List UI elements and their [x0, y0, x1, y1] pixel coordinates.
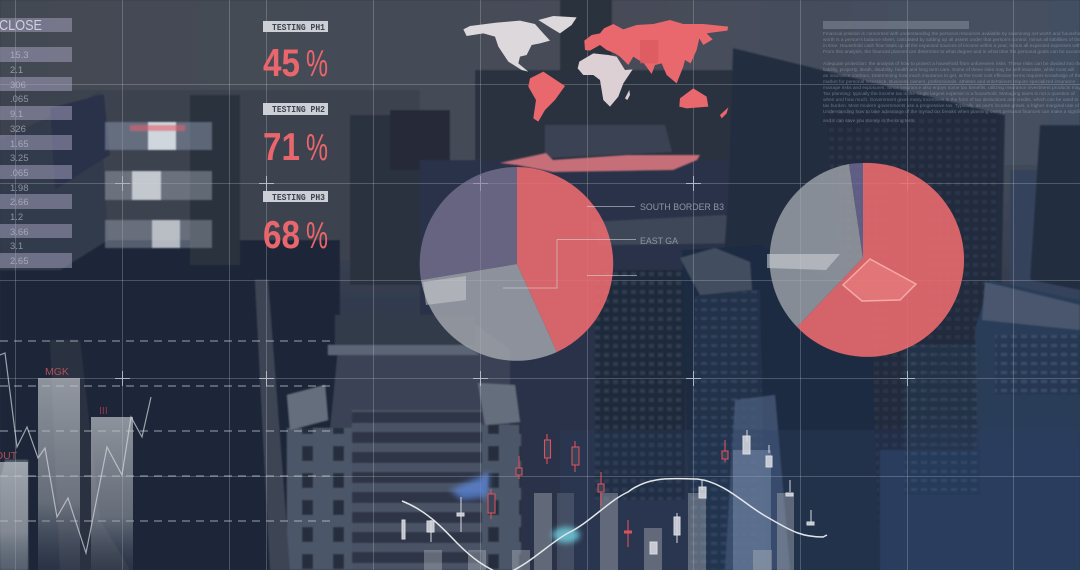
table striped rows — [0, 18, 72, 268]
north america — [463, 21, 550, 72]
purple slice — [420, 167, 517, 280]
first paragraph: in time. Household cash flow totals up all the expected sources of income within a year, minus all expected expenses within — [823, 43, 1080, 49]
central asia shade — [640, 40, 658, 63]
glow spots — [450, 472, 580, 543]
testing ph1: % — [306, 43, 328, 85]
table values: 3.66 — [10, 227, 28, 238]
testing ph1: TESTING PH1 — [272, 23, 326, 33]
text block: financial paragraph — [823, 21, 1080, 124]
table values: 2.1 — [10, 65, 23, 76]
pie chart one — [420, 167, 613, 361]
table values: 3.25 — [10, 153, 28, 164]
second paragraph: liability, property, death, disability, health and long term care. Some of these risks may be self-insurable, while most will — [823, 67, 1074, 73]
testing ph3: 68 — [263, 214, 300, 257]
gray slice — [770, 164, 863, 327]
bar middle — [91, 417, 133, 570]
map reflection smear — [500, 153, 700, 172]
table values: 2.65 — [10, 256, 28, 267]
second paragraph: Adequate protection: the analysis of how to protect a household from unforeseen risks. These risks can be divided into the — [823, 61, 1080, 67]
panel: close data table — [0, 17, 72, 268]
second paragraph: market for personal insurance. Business owners, professionals, athletes and entertainers require specialized insurance — [823, 79, 1076, 85]
south border label: SOUTH BORDER B3 — [640, 202, 724, 213]
second paragraph: an insurance contract. Determining how much insurance to get, at the most cost effective terms requires knowledge of the — [823, 73, 1080, 79]
label middle: III — [99, 405, 108, 417]
second paragraph: and it can save you money in the long term. — [823, 118, 916, 124]
greenland — [538, 16, 577, 33]
panel: testing percentages — [263, 21, 328, 257]
australia — [679, 88, 708, 108]
purple slice — [849, 163, 864, 258]
block heading bar — [823, 21, 969, 29]
red slice — [517, 167, 613, 352]
line series — [0, 353, 151, 553]
testing ph3: % — [306, 215, 328, 257]
first paragraph: Financial position is concerned with understanding the personal resources available by examining net worth and household — [823, 31, 1080, 37]
east label: EAST GA — [640, 236, 679, 247]
pie one callouts — [503, 202, 724, 288]
table values: 306 — [10, 80, 26, 91]
white candles — [402, 430, 814, 554]
bar three — [105, 220, 212, 248]
first paragraph: worth is a person's balance sheet, calculated by adding up all assets under that person's control, minus all liabilities of the — [823, 37, 1080, 43]
testing ph3 — [263, 191, 328, 257]
new zealand — [720, 107, 728, 118]
bottom candlestick chart — [402, 430, 827, 570]
roof outline — [843, 259, 916, 301]
table values: 3.1 — [10, 241, 23, 252]
bar one — [105, 122, 212, 150]
panel: progress bars — [105, 122, 212, 248]
table values: 1.2 — [10, 212, 23, 223]
table values: .065 — [10, 168, 28, 179]
table values: 326 — [10, 124, 26, 135]
testing ph1: 45 — [263, 42, 300, 85]
bar mgk — [38, 378, 80, 570]
madagascar — [625, 90, 630, 100]
light ledge — [767, 254, 840, 270]
translucent bars — [424, 450, 794, 570]
bar chart bottom left — [0, 353, 151, 570]
dashed guide lines — [0, 341, 332, 521]
table heading: CLOSE — [0, 17, 42, 34]
gray slice — [421, 264, 557, 361]
second paragraph: tax burden. Most modern governments use a progressive tax. Typically, as one's income grows, a higher marginal rate of — [823, 103, 1080, 109]
testing ph2: 71 — [263, 126, 300, 169]
testing ph1 — [263, 21, 328, 85]
bar left — [0, 462, 28, 570]
callout lines — [503, 206, 637, 288]
testing ph2 — [263, 103, 328, 169]
second paragraph: manage risks and exposures. Since insurance also enjoys some tax benefits, utilizing insurance investment products may be — [823, 85, 1080, 91]
testing ph3: TESTING PH3 — [272, 193, 325, 203]
red slice — [797, 163, 964, 357]
pie chart two — [767, 163, 964, 357]
table values: 9.1 — [10, 109, 23, 120]
testing ph2: TESTING PH2 — [272, 105, 325, 115]
red candles — [488, 434, 728, 547]
africa — [578, 53, 633, 107]
sine curve — [402, 479, 827, 570]
testing ph2: % — [306, 127, 328, 169]
table values: .065 — [10, 94, 28, 105]
table values: 2.66 — [10, 197, 28, 208]
second paragraph: when and how much. Government gives many incentives in the form of tax deductions and credits, which can be used to — [823, 97, 1079, 103]
table values: 15.3 — [10, 50, 28, 61]
bar two — [105, 171, 212, 200]
light rooftop inside gray — [423, 276, 466, 305]
table values — [10, 50, 28, 267]
second paragraph: Tax planning: typically the income tax is the single largest expense in a household. Managing taxes is not a question of — [823, 91, 1075, 97]
label mgk: MGK — [45, 366, 69, 378]
table values: 1.98 — [10, 183, 28, 194]
south america — [528, 72, 565, 122]
eurasia — [584, 20, 728, 83]
world map — [463, 16, 728, 122]
table values: 1.65 — [10, 139, 28, 150]
